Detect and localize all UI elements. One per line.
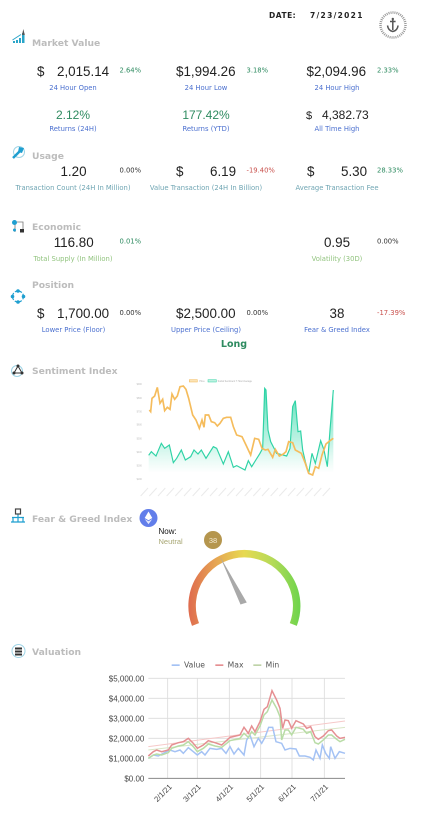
- chart: valuation line chart: $5,000.00: [109, 674, 145, 683]
- metric: 24 hour low: 3.18%: [246, 66, 269, 74]
- metric: 24 hour open: 2,015.14: [57, 64, 110, 79]
- chart: price vs sentiment: $500: [137, 438, 143, 440]
- chart: valuation line chart: $2,000.00: [109, 734, 145, 743]
- panel: sentiment index: [12, 364, 333, 496]
- metric: average transaction fee: $: [307, 164, 315, 179]
- chart: valuation line chart: $3,000.00: [109, 714, 145, 723]
- metric: all time high: $: [306, 110, 312, 122]
- metric: 24 hour high: [306, 64, 399, 92]
- chart: price vs sentiment: $300: [137, 466, 143, 468]
- metric: returns ytd: Returns (YTD): [182, 125, 230, 133]
- chart legend: [172, 661, 279, 670]
- metric: fear and greed: [304, 306, 406, 334]
- metric: returns 24h: Returns (24H): [49, 125, 97, 133]
- metric: 24 hour high: 24 Hour High: [315, 84, 359, 92]
- metric: transaction count: Transaction Count (24H In Million): [15, 184, 131, 192]
- metric: returns 24h: 2.12%: [56, 108, 90, 122]
- metric: 24 hour low: $1,994.26: [176, 64, 236, 79]
- chart: valuation line chart: $0.00: [124, 774, 145, 783]
- metric: transaction count: 1.20: [60, 164, 87, 179]
- metric: value transaction: $: [176, 164, 184, 179]
- metric: lower price: Lower Price (Floor): [42, 326, 106, 334]
- metric: value transaction: Value Transaction (24H In Billion): [150, 184, 262, 192]
- icon: network triangle: [12, 364, 24, 376]
- value badge: 38: [209, 536, 217, 545]
- heading: position: Position: [32, 280, 74, 291]
- metric: all time high: All Time High: [314, 125, 360, 133]
- metric: 24 hour low: [176, 64, 269, 92]
- date header: [269, 11, 364, 20]
- icon: wrench: [13, 146, 24, 158]
- chart: gauge arc: [192, 554, 297, 624]
- chart: valuation line chart: [109, 661, 345, 804]
- chart: valuation line chart: 5/1/21: [245, 782, 266, 804]
- metric: all time high: 4,382.73: [322, 108, 369, 122]
- icon: market value growth bars: [12, 29, 25, 43]
- icon: hierarchy: [11, 509, 25, 522]
- metric: average transaction fee: 5.30: [341, 164, 367, 179]
- value badge: [204, 531, 222, 549]
- chart legend: Min: [266, 661, 279, 670]
- date header: DATE:: [269, 11, 296, 20]
- chart: price vs sentiment: $800: [137, 398, 143, 400]
- chart: price vs sentiment: $700: [137, 411, 143, 413]
- chart legend: Social Sentiment 7 Hour Average: [218, 380, 253, 383]
- metric: 24 hour high: 2.33%: [377, 66, 399, 74]
- metric: returns ytd: [182, 108, 230, 133]
- metric: volatility: 0.00%: [377, 237, 399, 245]
- chart: price vs sentiment: $200: [137, 479, 143, 481]
- metric: upper price: [171, 306, 269, 334]
- metric: 24 hour open: 24 Hour Open: [49, 84, 97, 92]
- metric: volatility: Volatility (30D): [312, 255, 363, 263]
- metric: upper price: 0.00%: [246, 309, 269, 317]
- metric: lower price: 1,700.00: [57, 306, 109, 321]
- chart: price vs sentiment: $400: [137, 452, 143, 454]
- metric: total supply: 0.01%: [120, 237, 142, 245]
- icon: move arrows: [11, 289, 25, 304]
- now label: Neutral: [158, 537, 183, 546]
- chart: valuation line chart: 2/1/21: [152, 782, 174, 804]
- date header: 7/23/2021: [310, 11, 364, 20]
- chart: valuation line chart: $1,000.00: [109, 754, 145, 763]
- chart legend: Max: [228, 661, 244, 670]
- heading: fear and greed index: Fear & Greed Index: [32, 514, 132, 525]
- chart: price vs sentiment: [137, 380, 333, 496]
- metric: lower price: $: [37, 306, 45, 321]
- chart: price vs sentiment: $600: [137, 425, 143, 427]
- metric: 24 hour high: $2,094.96: [306, 64, 366, 79]
- metric: volatility: 0.95: [324, 235, 350, 250]
- metric: total supply: 116.80: [54, 235, 94, 250]
- chart: valuation line chart: $4,000.00: [109, 694, 145, 703]
- heading: usage: Usage: [32, 151, 64, 162]
- metric: 24 hour low: 24 Hour Low: [185, 84, 228, 92]
- metric: upper price: $2,500.00: [176, 306, 236, 321]
- metric: returns ytd: 177.42%: [182, 108, 230, 122]
- metric: value transaction: 6.19: [210, 164, 236, 179]
- metric: 24 hour open: 2.64%: [120, 66, 142, 74]
- chart: valuation line chart: 7/1/21: [309, 782, 330, 804]
- gauge needle: [220, 556, 247, 604]
- metric: lower price: [37, 306, 142, 334]
- metric: fear and greed: Fear & Greed Index: [304, 326, 370, 334]
- metric: transaction count: 0.00%: [120, 167, 142, 175]
- logo: anchor seal: [380, 12, 406, 38]
- chart legend: Price: [199, 380, 205, 383]
- metric: value transaction: -19.40%: [246, 167, 275, 175]
- metric: total supply: [32, 235, 142, 263]
- metric: 24 hour open: $: [37, 64, 45, 79]
- metric: upper price: Upper Price (Ceiling): [171, 326, 241, 334]
- metric: lower price: 0.00%: [120, 309, 142, 317]
- chart: valuation line chart: 6/1/21: [276, 782, 298, 804]
- chart legend: Value: [184, 661, 205, 670]
- icon: flow nodes: [12, 220, 24, 232]
- metric: value transaction: [150, 164, 275, 192]
- position signal: Long: [221, 339, 247, 350]
- panel: economic: [12, 220, 399, 263]
- panel: position: [11, 280, 406, 350]
- metric: returns 24h: [49, 108, 97, 133]
- heading: sentiment index: Sentiment Index: [32, 366, 118, 377]
- panel: fear and greed index: [11, 509, 297, 624]
- now label: [158, 527, 183, 546]
- metric: average transaction fee: [295, 164, 403, 192]
- heading: economic: Economic: [32, 222, 81, 233]
- panel: market value: [12, 29, 399, 133]
- panel: valuation: [12, 644, 345, 804]
- metric: volatility: [312, 235, 399, 263]
- metric: average transaction fee: 28.33%: [377, 167, 403, 175]
- chart legend: [189, 380, 253, 383]
- metric: all time high: [306, 108, 369, 133]
- chart: price vs sentiment: $900: [137, 384, 143, 386]
- metric: transaction count: [15, 164, 142, 192]
- panel: usage: [13, 146, 403, 192]
- metric: fear and greed: -17.39%: [377, 309, 406, 317]
- chart: valuation line chart: 4/1/21: [214, 782, 235, 804]
- icon: ethereum badge: [140, 509, 158, 527]
- now label: Now:: [158, 527, 177, 536]
- heading: valuation: Valuation: [32, 647, 81, 658]
- icon: database: [12, 644, 25, 658]
- chart: valuation line chart: 3/1/21: [181, 782, 203, 804]
- metric: 24 hour open: [37, 64, 142, 92]
- metric: average transaction fee: Average Transaction Fee: [295, 184, 379, 192]
- heading: market value: Market Value: [32, 38, 100, 49]
- metric: total supply: Total Supply (In Million): [32, 255, 113, 263]
- metric: fear and greed: 38: [330, 306, 344, 321]
